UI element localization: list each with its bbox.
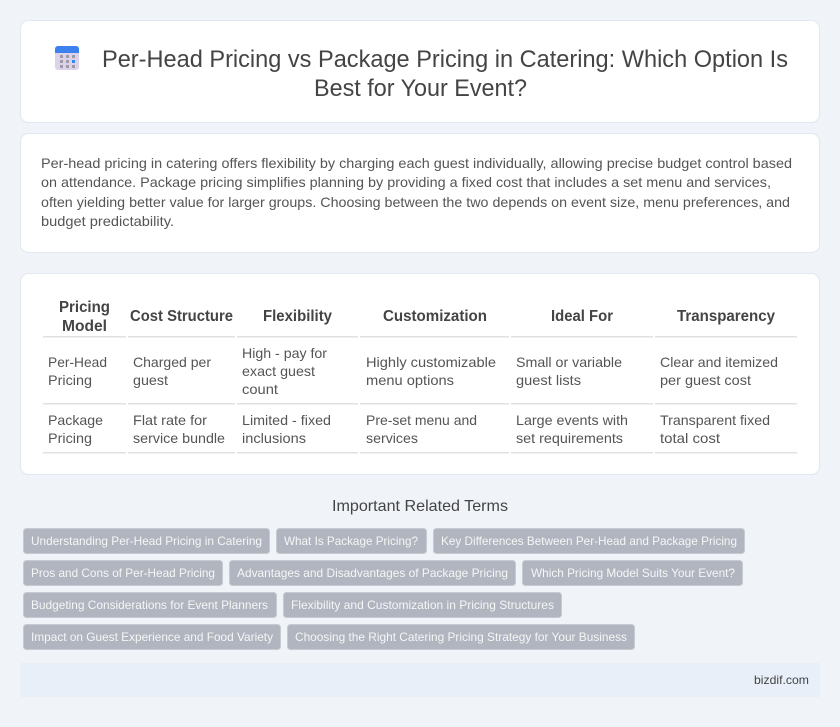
table row: package pricing: Package bbox=[48, 412, 103, 428]
table row: per-head pricing: Highly customizable bbox=[366, 354, 496, 370]
tag: Budgeting Considerations for Event Planners bbox=[31, 598, 268, 612]
table row: per-head pricing: Small or variable bbox=[516, 354, 622, 370]
table header row: Model bbox=[62, 318, 107, 335]
table row: per-head pricing: menu options bbox=[366, 372, 454, 388]
table row: per-head pricing: Per-Head bbox=[48, 354, 107, 370]
tag bbox=[284, 592, 562, 618]
table row: package pricing: total cost bbox=[660, 430, 720, 446]
table row: per-head pricing bbox=[48, 345, 778, 397]
text block: intro: on attendance. Package pricing simplifies planning by providing a fixed cost that includes a set menu and services, bbox=[41, 174, 771, 190]
text block: intro bbox=[41, 155, 792, 229]
table header row: Ideal For bbox=[551, 308, 613, 325]
tag: Key Differences Between Per-Head and Package Pricing bbox=[441, 534, 737, 548]
table row: package pricing: Transparent fixed bbox=[660, 412, 770, 428]
table header row: Cost Structure bbox=[130, 308, 233, 325]
tag: What Is Package Pricing? bbox=[284, 534, 418, 548]
heading: important related terms: Important Related Terms bbox=[332, 498, 508, 515]
panel: intro paragraph bbox=[20, 134, 820, 252]
table header row: Flexibility bbox=[263, 308, 332, 325]
tag bbox=[522, 560, 742, 586]
table header row: Pricing bbox=[59, 299, 110, 316]
table row: per-head pricing: count bbox=[242, 381, 278, 397]
footer bbox=[20, 663, 820, 697]
table row: per-head pricing: Pricing bbox=[48, 372, 92, 388]
tag bbox=[24, 560, 222, 586]
table row: package pricing: Pricing bbox=[48, 430, 92, 446]
table row: package pricing: inclusions bbox=[242, 430, 306, 446]
table row: per-head pricing: per guest cost bbox=[660, 372, 751, 388]
table row: package pricing bbox=[48, 412, 770, 446]
table row: per-head pricing: guest lists bbox=[516, 372, 581, 388]
table header row: Customization bbox=[383, 308, 487, 325]
table row: per-head pricing: High - pay for bbox=[242, 345, 327, 361]
table header row: Transparency bbox=[677, 308, 775, 325]
table row: per-head pricing: Charged per bbox=[133, 354, 211, 370]
title: Per-Head Pricing vs Package Pricing in Catering: Which Option Is bbox=[102, 46, 788, 73]
table row: per-head pricing: Clear and itemized bbox=[660, 354, 778, 370]
table row: package pricing: service bundle bbox=[133, 430, 225, 446]
title: Best for Your Event? bbox=[314, 75, 527, 102]
tag bbox=[288, 624, 634, 650]
table row: package pricing: set requirements bbox=[516, 430, 623, 446]
title bbox=[102, 46, 788, 102]
table row: package pricing: Flat rate for bbox=[133, 412, 207, 428]
tag bbox=[276, 528, 426, 554]
table row: per-head pricing: guest bbox=[133, 372, 168, 388]
footer: bizdif.com bbox=[754, 673, 809, 687]
text block: intro: often yielding better value for larger groups. Choosing between the two depends on event size, menu preferences, and bbox=[41, 194, 790, 210]
tag: Impact on Guest Experience and Food Variety bbox=[31, 630, 273, 644]
panel: comparison table bbox=[20, 274, 820, 474]
tag bbox=[24, 528, 270, 554]
tag bbox=[24, 624, 280, 650]
table row: package pricing: Pre-set menu and bbox=[366, 412, 477, 428]
tag: Understanding Per-Head Pricing in Catering bbox=[31, 534, 262, 548]
table row: per-head pricing: exact guest bbox=[242, 363, 315, 379]
tag: Flexibility and Customization in Pricing Structures bbox=[291, 598, 554, 612]
text block: intro: budget predictability. bbox=[41, 213, 174, 229]
tag: Pros and Cons of Per-Head Pricing bbox=[31, 566, 215, 580]
table row: package pricing: services bbox=[366, 430, 418, 446]
tag bbox=[24, 592, 276, 618]
tag: Choosing the Right Catering Pricing Strategy for Your Business bbox=[295, 630, 627, 644]
panel: title card bbox=[20, 20, 820, 122]
table row: package pricing: Large events with bbox=[516, 412, 628, 428]
tag bbox=[230, 560, 516, 586]
tag: Advantages and Disadvantages of Package Pricing bbox=[237, 566, 508, 580]
table row: package pricing: Limited - fixed bbox=[242, 412, 331, 428]
panel: related term tags bbox=[24, 528, 744, 650]
tag bbox=[434, 528, 744, 554]
icon: calendar bbox=[55, 46, 79, 70]
tag: Which Pricing Model Suits Your Event? bbox=[531, 566, 735, 580]
table header row bbox=[59, 299, 775, 335]
text block: intro: Per-head pricing in catering offers flexibility by charging each guest individually, allowing precise budget control based bbox=[41, 155, 792, 171]
